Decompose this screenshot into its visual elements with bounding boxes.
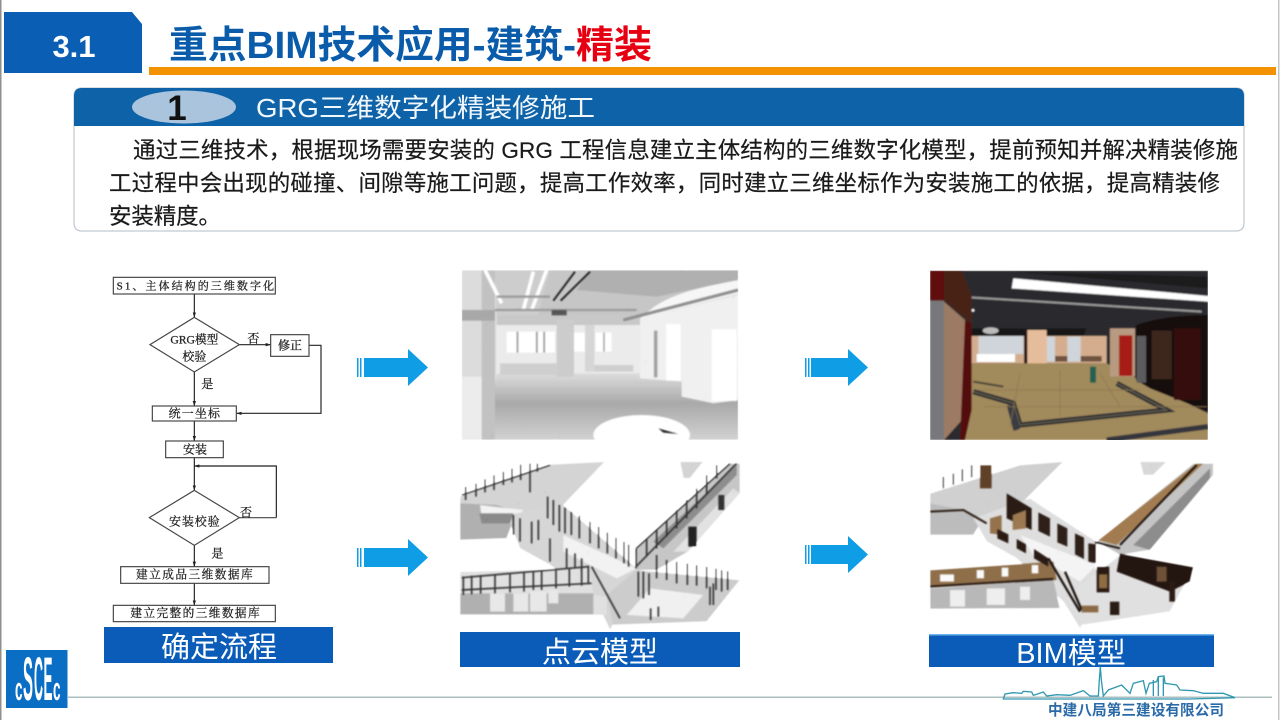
caption: BIM模型 bbox=[929, 634, 1214, 670]
number badge: 1 bbox=[167, 89, 187, 128]
body text bbox=[109, 138, 1238, 229]
panel: GRG description bbox=[74, 88, 1244, 231]
logo: CSCEC: S bbox=[23, 645, 33, 713]
skyline icon bbox=[1003, 667, 1235, 699]
section number tab bbox=[4, 12, 142, 73]
body text: 安装精度。 bbox=[109, 204, 221, 229]
flowchart: 是 bbox=[211, 547, 223, 561]
panel header bar bbox=[74, 88, 1244, 126]
flowchart: 是 bbox=[201, 377, 213, 391]
arrow: flowchart to point cloud bottom bbox=[357, 539, 428, 576]
logo: CSCEC: C bbox=[34, 645, 43, 713]
body text: 通过三维技术，根据现场需要安装的 GRG 工程信息建立主体结构的三维数字化模型，提前预知并解决精装修施 bbox=[133, 138, 1238, 163]
image: BIM overview bbox=[930, 462, 1213, 628]
logo: CSCEC: c bbox=[15, 671, 22, 707]
section number tab: 3.1 bbox=[52, 29, 96, 64]
flowchart: 建立成品三维数据库 bbox=[136, 568, 253, 582]
arrow: point cloud to BIM top bbox=[805, 349, 868, 386]
flowchart bbox=[113, 277, 321, 622]
flowchart: 安装校验 bbox=[169, 514, 220, 529]
flowchart: 安装 bbox=[183, 442, 207, 457]
panel heading: GRG三维数字化精装修施工 bbox=[256, 93, 595, 123]
flowchart: 统一坐标 bbox=[169, 406, 221, 421]
company name: 中建八局第三建设有限公司 bbox=[1048, 701, 1224, 719]
arrow: point cloud to BIM bottom bbox=[805, 536, 868, 573]
caption: 点云模型: 点云模型 bbox=[542, 636, 658, 669]
logo: CSCEC: c bbox=[53, 671, 60, 707]
body text: 工过程中会出现的碰撞、间隙等施工问题，提高工作效率，同时建立三维坐标作为安装施工的依据，提高精装修 bbox=[109, 171, 1220, 196]
flowchart: 校验 bbox=[182, 349, 206, 364]
caption: 点云模型 bbox=[460, 632, 740, 669]
flowchart: 否 bbox=[240, 506, 252, 520]
caption: BIM模型: BIM模型 bbox=[1016, 637, 1126, 670]
image: point cloud interior bbox=[462, 270, 738, 455]
flowchart: 修正 bbox=[278, 339, 302, 353]
flowchart: 建立完整的三维数据库 bbox=[130, 606, 260, 620]
logo: CSCEC: E bbox=[44, 645, 52, 713]
logo: CSCEC bbox=[6, 645, 68, 713]
caption: 确定流程 bbox=[104, 627, 333, 664]
title: 重点BIM技术应用-建筑- bbox=[169, 25, 576, 67]
flowchart: S1、主体结构的三维数字化 bbox=[117, 278, 274, 292]
title: 精装 bbox=[576, 25, 652, 67]
image: BIM interior bbox=[930, 271, 1208, 440]
number badge bbox=[132, 89, 236, 128]
flowchart: 否 bbox=[247, 332, 259, 346]
arrow: flowchart to point cloud top bbox=[357, 349, 428, 386]
caption: 确定流程: 确定流程 bbox=[161, 631, 277, 664]
flowchart: GRG模型 bbox=[170, 332, 219, 346]
image: point cloud overview bbox=[460, 462, 740, 630]
